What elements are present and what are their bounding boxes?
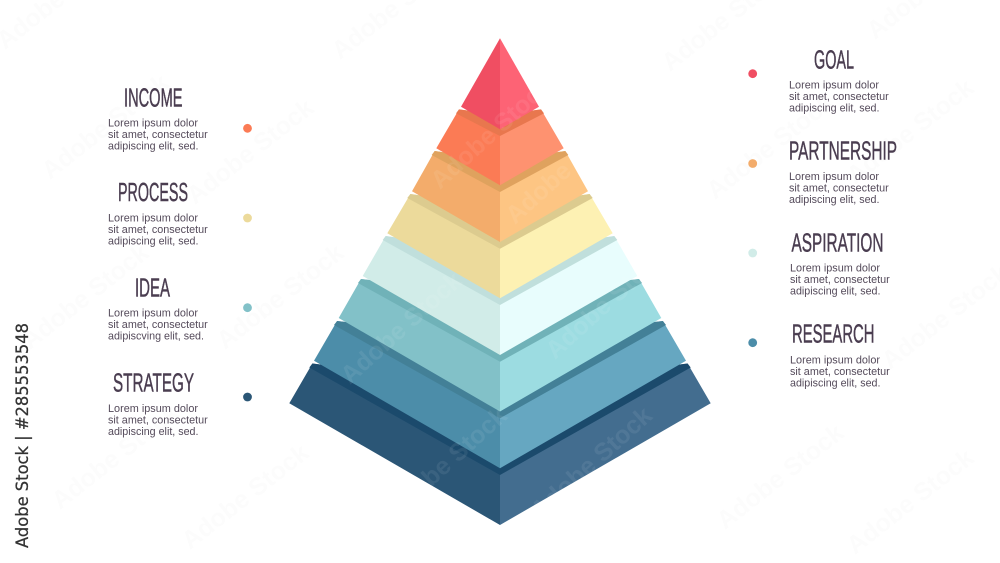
layer 8: strategy <box>289 364 711 525</box>
dot: partnership <box>748 159 757 168</box>
left label: idea <box>108 273 208 342</box>
right label: partnership: PARTNERSHIP <box>789 135 897 165</box>
right label: research: adipiscing elit, sed. <box>790 377 880 389</box>
pyramid watermark: Adobe Stock <box>525 401 658 524</box>
left label: strategy: Lorem ipsum dolor <box>108 403 198 415</box>
left label: strategy <box>108 368 208 438</box>
dot: aspiration <box>748 249 757 257</box>
pyramid <box>289 38 711 525</box>
left label: process: adipiscing elit, sed. <box>108 236 198 248</box>
dot: goal <box>748 69 757 78</box>
layer 1: goal <box>461 38 539 129</box>
right label: goal: GOAL <box>814 44 854 74</box>
left label: income <box>108 83 208 152</box>
right label: research: Lorem ipsum dolor <box>790 354 880 366</box>
right label: research: RESEARCH <box>792 318 874 348</box>
right label: research <box>790 318 890 389</box>
pyramid watermark: Adobe Stock <box>425 71 558 194</box>
left label: process: PROCESS <box>118 177 188 207</box>
right label: aspiration: Lorem ipsum dolor <box>790 263 880 275</box>
dot: process <box>243 214 252 222</box>
dot: income <box>243 124 252 133</box>
stock id side text: Adobe Stock | #285553548 <box>13 323 32 548</box>
right label: research: sit amet, consectetur <box>790 366 890 378</box>
right label: partnership <box>789 135 897 206</box>
layer 3: partnership <box>412 151 588 242</box>
layer 7: research <box>314 321 686 468</box>
layer 2: income <box>436 109 564 185</box>
right label: aspiration <box>790 228 890 298</box>
layer 6: idea <box>339 279 661 412</box>
left label: income: INCOME <box>124 83 182 113</box>
left label: income: sit amet, consectetur <box>108 129 208 141</box>
left label: income: Lorem ipsum dolor <box>108 118 198 130</box>
pyramid watermark: Adobe Stock <box>335 266 468 389</box>
pyramid watermark: Adobe Stock <box>500 106 633 229</box>
right label: goal <box>789 44 889 114</box>
left label: strategy: adipiscing elit, sed. <box>108 426 198 438</box>
dot: idea <box>243 303 252 312</box>
left label: income: adipiscing elit, sed. <box>108 140 198 152</box>
pyramid watermark <box>335 71 673 524</box>
left label: process: Lorem ipsum dolor <box>108 213 198 225</box>
right label: goal: adipiscing elit, sed. <box>789 102 880 114</box>
left label: idea: Lorem ipsum dolor <box>108 308 198 320</box>
right label: partnership: sit amet, consectetur <box>789 182 889 194</box>
pyramid watermark: Adobe Stock <box>540 241 673 364</box>
right label: aspiration: adipiscing elit, sed. <box>790 286 880 298</box>
dot: research <box>748 338 757 347</box>
left label: idea: sit amet, consectetur <box>108 319 208 331</box>
layer 5: aspiration <box>363 236 637 355</box>
layer 4: process <box>387 194 613 298</box>
right label: aspiration: sit amet, consectetur <box>790 274 890 286</box>
left label: strategy: STRATEGY <box>113 368 194 398</box>
left label: process: sit amet, consectetur <box>108 224 208 236</box>
left label: idea: adipiscving elit, sed. <box>108 330 204 342</box>
pyramid watermark: Adobe Stock <box>380 401 513 524</box>
right label: aspiration: ASPIRATION <box>792 228 884 258</box>
right label: goal: sit amet, consectetur <box>789 91 889 103</box>
left label: strategy: sit amet, consectetur <box>108 415 208 427</box>
dot: strategy <box>243 393 252 401</box>
left label: process <box>108 177 208 248</box>
right label: partnership: adipiscing elit, sed. <box>789 194 880 206</box>
left label: idea: IDEA <box>135 273 170 303</box>
right label: goal: Lorem ipsum dolor <box>789 80 879 92</box>
right label: partnership: Lorem ipsum dolor <box>789 171 879 183</box>
